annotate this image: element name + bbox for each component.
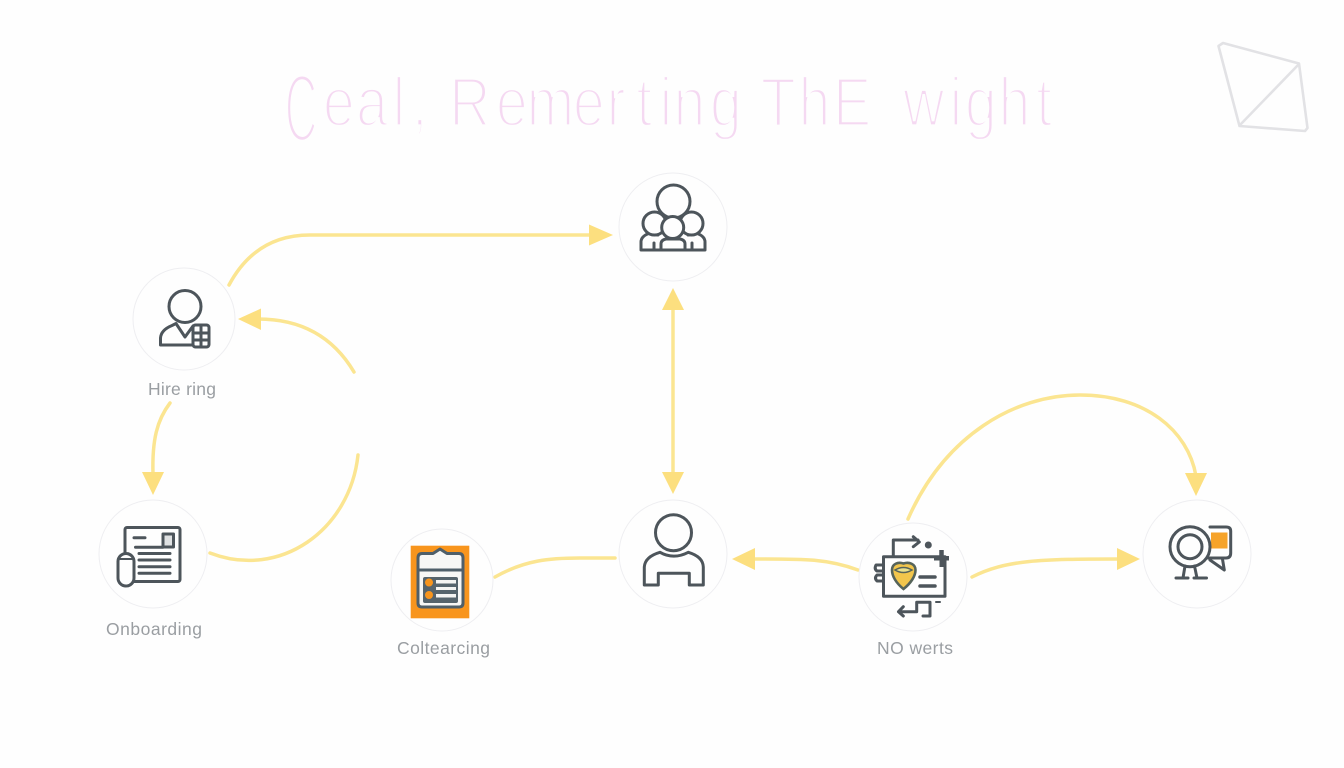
node: onboarding: [99, 500, 207, 639]
node: collecting: [391, 529, 493, 658]
icon: document and mouse: [118, 528, 180, 586]
icon: person with grid: [160, 290, 209, 347]
title: eal, Remerting ThE wight: [323, 63, 1052, 141]
icon: group of people: [641, 185, 705, 250]
node: person: [619, 500, 727, 608]
node: team: [619, 173, 727, 281]
arrow: events arc to goal: [908, 395, 1207, 519]
label: NO werts: NO werts: [877, 638, 953, 658]
icon: card with heart and arrows: [875, 537, 949, 616]
arrow: onboarding curve: [210, 455, 358, 560]
arrow: events to person: [732, 548, 858, 570]
title: [285, 54, 1052, 161]
icon: orange clipboard: [411, 546, 469, 618]
icon: person: [644, 515, 703, 585]
label: Coltearcing: Coltearcing: [397, 638, 490, 658]
arrow: team and person double arrow: [662, 288, 684, 494]
arrow: events to goal: [972, 548, 1140, 577]
arrow: hiring to onboarding: [142, 403, 170, 495]
arrow: loop back to hiring: [238, 308, 354, 372]
node: goal: [1143, 500, 1251, 608]
node: hiring: [133, 268, 235, 399]
node: events: [859, 523, 967, 658]
label: Onboarding: Onboarding: [106, 619, 202, 639]
arrow: collecting to person: [495, 558, 615, 577]
arrow: hiring to team: [229, 224, 613, 285]
icon: target and speech bubble: [1170, 527, 1231, 578]
title: C: [285, 54, 317, 161]
icon: kite outline: [1218, 43, 1308, 131]
label: Hire ring: Hire ring: [148, 379, 216, 399]
